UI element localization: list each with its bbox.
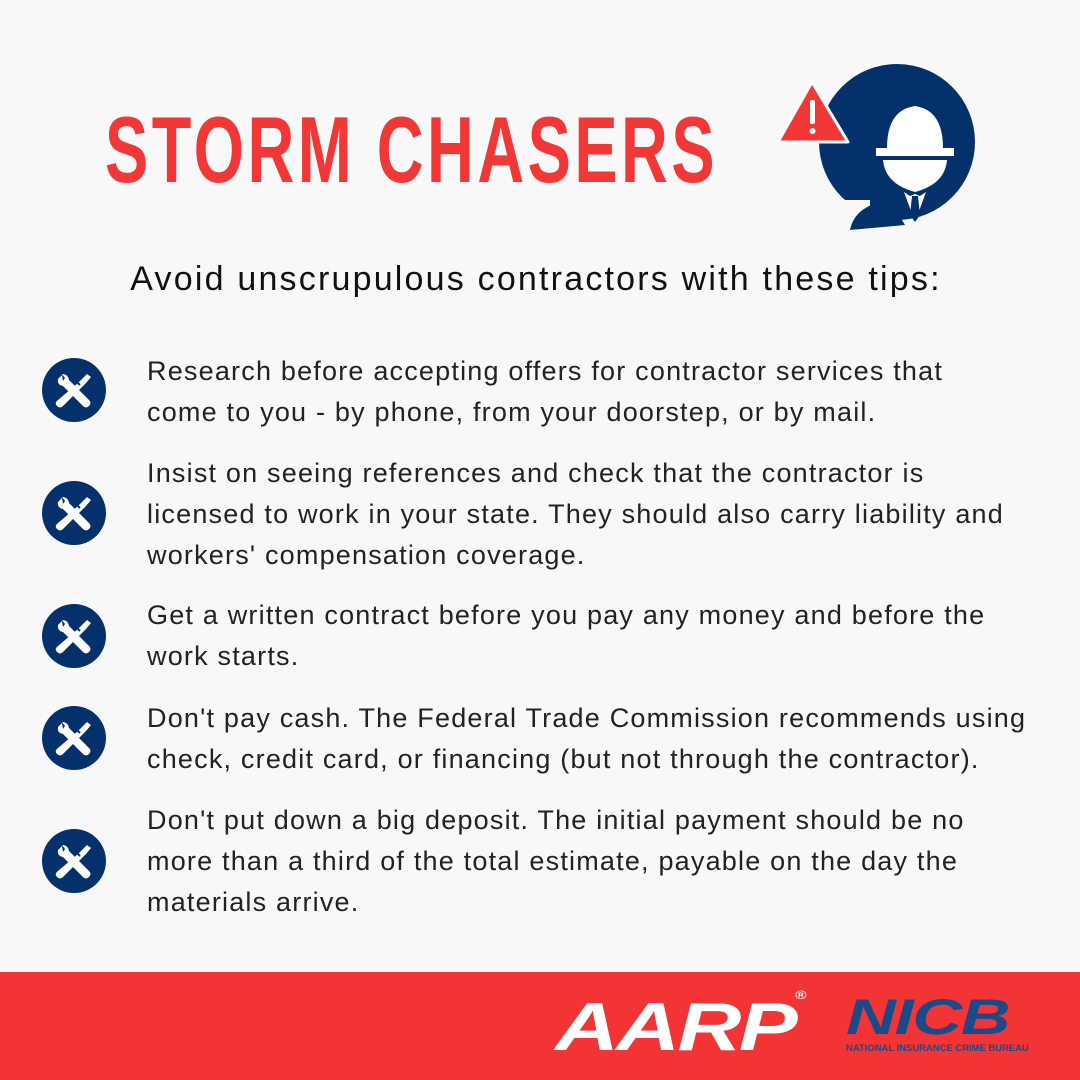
logo: NICB: NATIONAL INSURANCE CRIME BUREAU [846,1043,1029,1053]
text: tip 4: check, credit card, or financing (but not through the contractor). [147,744,980,774]
text: tip 3: work starts. [147,641,299,671]
text: tip 1: come to you - by phone, from your doorstep, or by mail. [147,397,876,427]
icon: tools 2 [42,481,106,545]
text: tip 4: Don't pay cash. The Federal Trade Commission recommends using [147,703,1026,733]
icon: tools 3 [42,604,106,668]
icon: tools 1 [42,358,106,422]
text: tip 1: Research before accepting offers for contractor services that [147,356,943,386]
text: tip 2: Insist on seeing references and check that the contractor is [147,458,924,488]
tip 3 [42,600,985,671]
text: tip 3 [147,600,985,671]
icon: tools 4 [42,706,106,770]
footer bar [0,972,1080,1080]
icon: tools 5 [42,829,106,893]
text: tip 5 [147,805,965,917]
tip 5 [42,805,965,917]
text: tip 5: materials arrive. [147,887,359,917]
text: tip 5: more than a third of the total estimate, payable on the day the [147,846,958,876]
text: tip 5: Don't put down a big deposit. The initial payment should be no [147,805,965,835]
tip 4 [42,703,1026,774]
text: tip 2: licensed to work in your state. They should also carry liability and [147,499,1004,529]
text: tip 3: Get a written contract before you pay any money and before the [147,600,985,630]
text: tip 4 [147,703,1026,774]
logo: AARP: AARP® [555,988,804,1065]
tip 1 [42,356,943,427]
title: STORM CHASERS [105,97,718,202]
subtitle: Avoid unscrupulous contractors with these tips: [130,260,942,298]
tips list [42,356,1026,917]
text: tip 2: workers' compensation coverage. [147,540,586,570]
tip 2 [42,458,1004,570]
logo: NICB: NICB [846,989,1009,1045]
icon: contractor with warning [780,64,975,230]
text: tip 1 [147,356,943,427]
text: tip 2 [147,458,1004,570]
